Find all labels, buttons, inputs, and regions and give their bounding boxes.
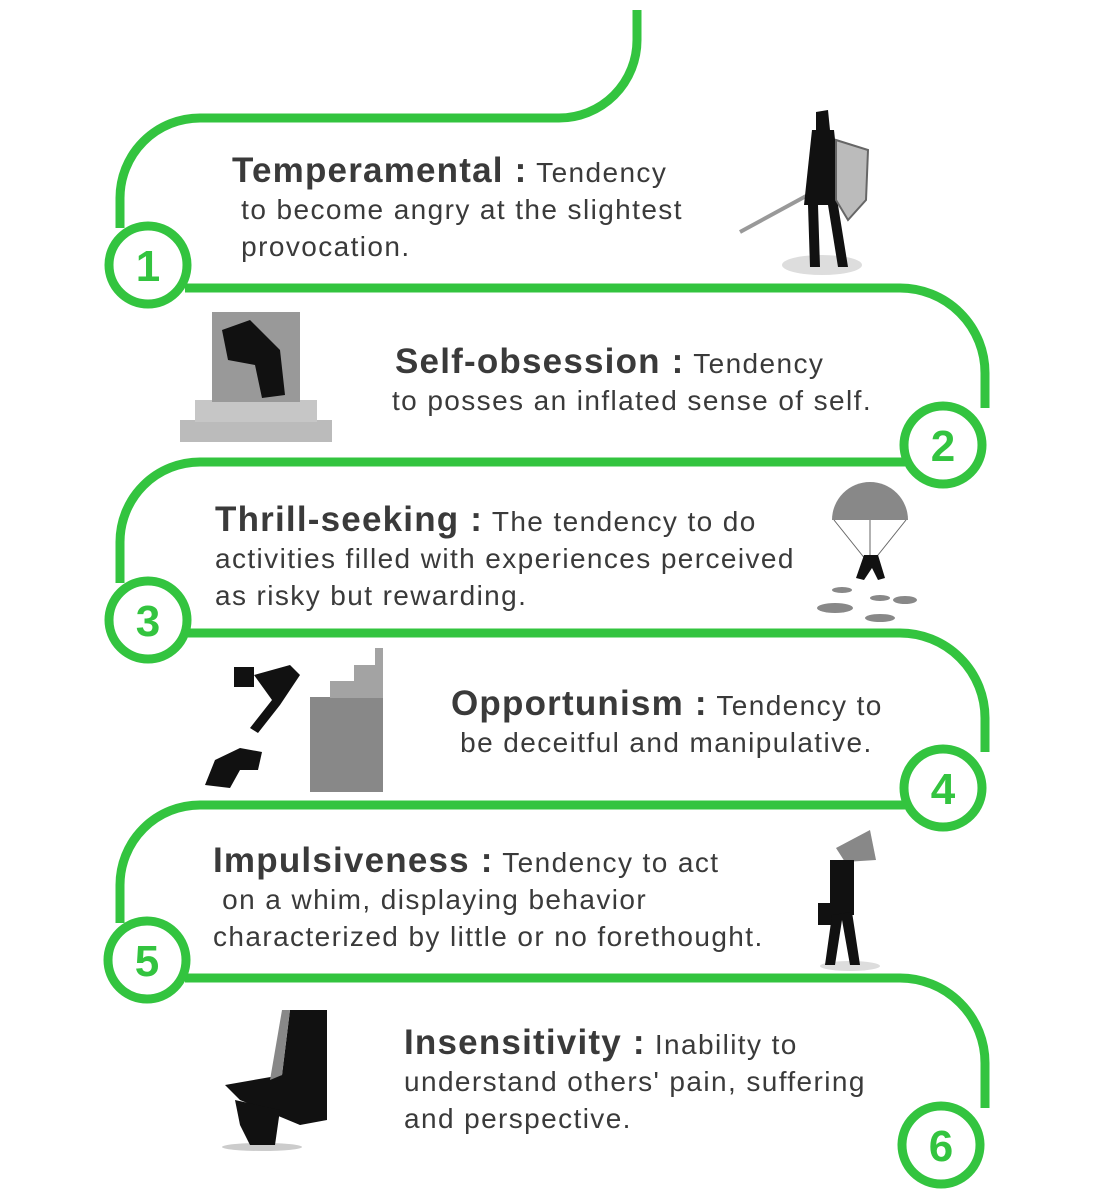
text block 2: Self-obsession (392, 342, 872, 416)
circle 6: 6 (929, 1122, 953, 1171)
icon: jumping man and stairs (205, 648, 383, 792)
circle 3 (109, 581, 187, 659)
circle 4 (904, 749, 982, 827)
circle 2 (904, 406, 982, 484)
text block 2: Self-obsession: to posses an inflated sense of self. (392, 385, 872, 416)
circle 4: 4 (931, 765, 956, 814)
text block 5: Impulsiveness (213, 841, 764, 952)
text block 1: Temperamental: Temperamental : Tendency (232, 151, 667, 190)
text block 6: Insensitivity: and perspective. (404, 1103, 632, 1134)
circle 1: 1 (136, 242, 160, 291)
circle 3: 3 (136, 597, 160, 646)
text block 3: Thrill-seeking: as risky but rewarding. (215, 580, 527, 611)
text block 3: Thrill-seeking: activities filled with experiences perceived (215, 543, 795, 574)
text block 5: Impulsiveness: characterized by little or no forethought. (213, 921, 764, 952)
text block 5: Impulsiveness: Impulsiveness : Tendency to act (213, 841, 719, 880)
text block 1: Temperamental: to become angry at the slightest (241, 194, 683, 225)
text block 3: Thrill-seeking: Thrill-seeking : The tendency to do (215, 500, 757, 539)
text block 6: Insensitivity (404, 1023, 866, 1134)
text block 4: Opportunism: be deceitful and manipulative. (460, 727, 873, 758)
icon: man with megaphone (818, 830, 880, 971)
text block 4: Opportunism: Opportunism : Tendency to (451, 684, 883, 723)
text block 1: Temperamental: provocation. (241, 231, 411, 262)
icon: man slumped on throne (180, 312, 332, 442)
circle 6 (902, 1106, 980, 1184)
circle 5: 5 (135, 937, 159, 986)
text block 6: Insensitivity: understand others' pain, suffering (404, 1066, 866, 1097)
icon: man with sword and shield (740, 110, 868, 275)
icon: parachuting man over traps (817, 482, 917, 622)
text block 6: Insensitivity: Insensitivity : Inability to (404, 1023, 798, 1062)
circle 2: 2 (931, 422, 955, 471)
text block 1: Temperamental (232, 151, 683, 262)
circle 5 (108, 921, 186, 999)
text block 3: Thrill-seeking (215, 500, 795, 611)
text block 4: Opportunism (451, 684, 883, 758)
icon: giant shoe crushing man (222, 1010, 327, 1151)
text block 5: Impulsiveness: on a whim, displaying behavior (222, 884, 647, 915)
circle 1 (109, 226, 187, 304)
text block 2: Self-obsession: Self-obsession : Tendency (395, 342, 824, 381)
